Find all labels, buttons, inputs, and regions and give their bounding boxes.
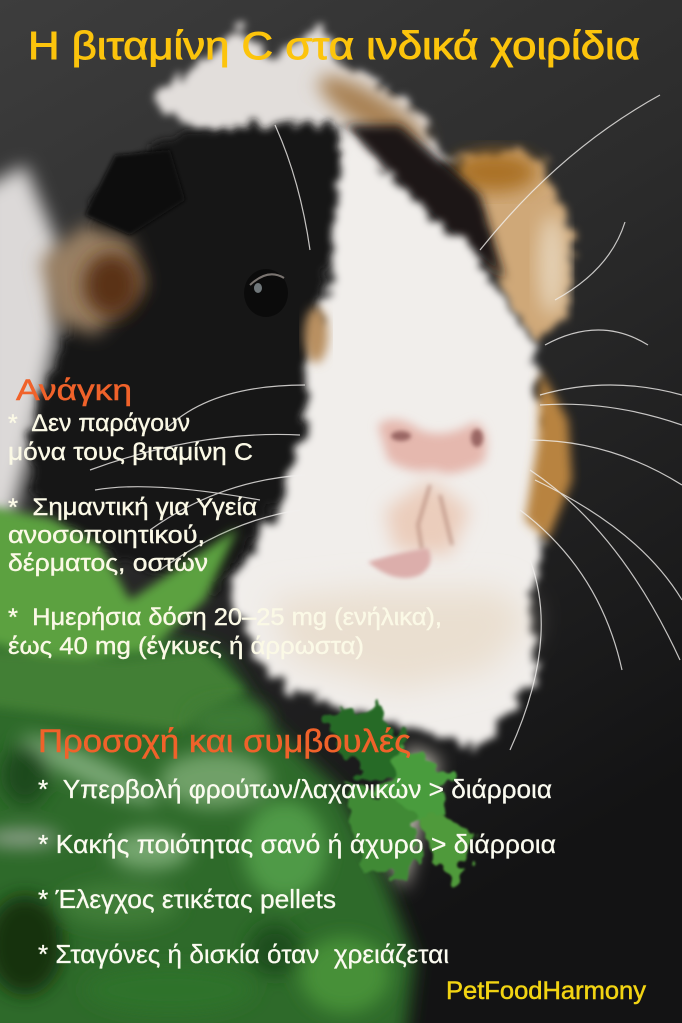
ear shadow orange: [84, 253, 140, 317]
heading: need: Ανάγκη: [16, 374, 132, 407]
need list: δέρματος, οστών: [8, 550, 208, 577]
tips list: [38, 774, 556, 969]
section: cautions and tips: [38, 723, 556, 969]
white snout: [230, 130, 550, 745]
nostrils: [391, 429, 483, 447]
brand credit: PetFoodHarmony: [446, 977, 646, 1005]
muzzle pink shading: [385, 480, 470, 555]
need list: ανοσοποιητικού,: [8, 522, 205, 549]
lower body cream: [270, 590, 530, 690]
parsley blurred top leaves: [0, 505, 245, 730]
left ear dark tip: [85, 150, 185, 235]
right black patch: [345, 125, 505, 280]
tongue: [368, 548, 431, 578]
nose: [378, 420, 487, 474]
right ear orange top: [453, 152, 537, 192]
parsley mid highlights: [0, 702, 390, 1014]
left ear: [40, 225, 145, 335]
mouth line: [418, 485, 452, 550]
sharp parsley sprig: [330, 705, 480, 885]
top white crest: [150, 25, 455, 175]
need list: * Ημερήσια δόση 20–25 mg (ενήλικα),: [8, 604, 442, 631]
need list: * Δεν παράγουν: [8, 410, 190, 437]
heading: cautions: Προσοχή και συμβουλές: [38, 723, 411, 759]
black face patch: [30, 125, 345, 590]
need list: μόνα τους βιταμίνη C: [8, 439, 253, 466]
tips list: * Υπερβολή φρούτων/λαχανικών > διάρροια: [38, 774, 552, 804]
whiskers: [90, 95, 682, 750]
left body fur: [0, 165, 60, 520]
tips list: * Κακής ποιότητας σανό ή άχυρο > διάρροια: [38, 829, 556, 859]
guinea pig photo: [0, 25, 682, 750]
tips list: * Σταγόνες ή δισκία όταν χρειάζεται: [38, 939, 449, 969]
right ear pale edge: [538, 215, 566, 315]
need list: [8, 410, 442, 660]
right ear: [455, 155, 570, 345]
faint white body below sprig: [385, 745, 440, 890]
need list: έως 40 mg (έγκυες ή άρρωστα): [8, 633, 364, 660]
section: need: [8, 374, 442, 660]
eye: [244, 269, 288, 317]
tips list: * Έλεγχος ετικέτας pellets: [38, 884, 336, 914]
parsley dark mass: [0, 620, 415, 1023]
title: Η βιταμίνη C στα ινδικά χοιρίδια: [28, 25, 640, 68]
need list: * Σημαντική για Υγεία: [8, 494, 257, 521]
tan crest patch: [310, 64, 434, 160]
parsley foreground: [0, 505, 480, 1023]
orange cheek fringe: [525, 370, 572, 540]
orange patch by eye: [304, 307, 328, 363]
